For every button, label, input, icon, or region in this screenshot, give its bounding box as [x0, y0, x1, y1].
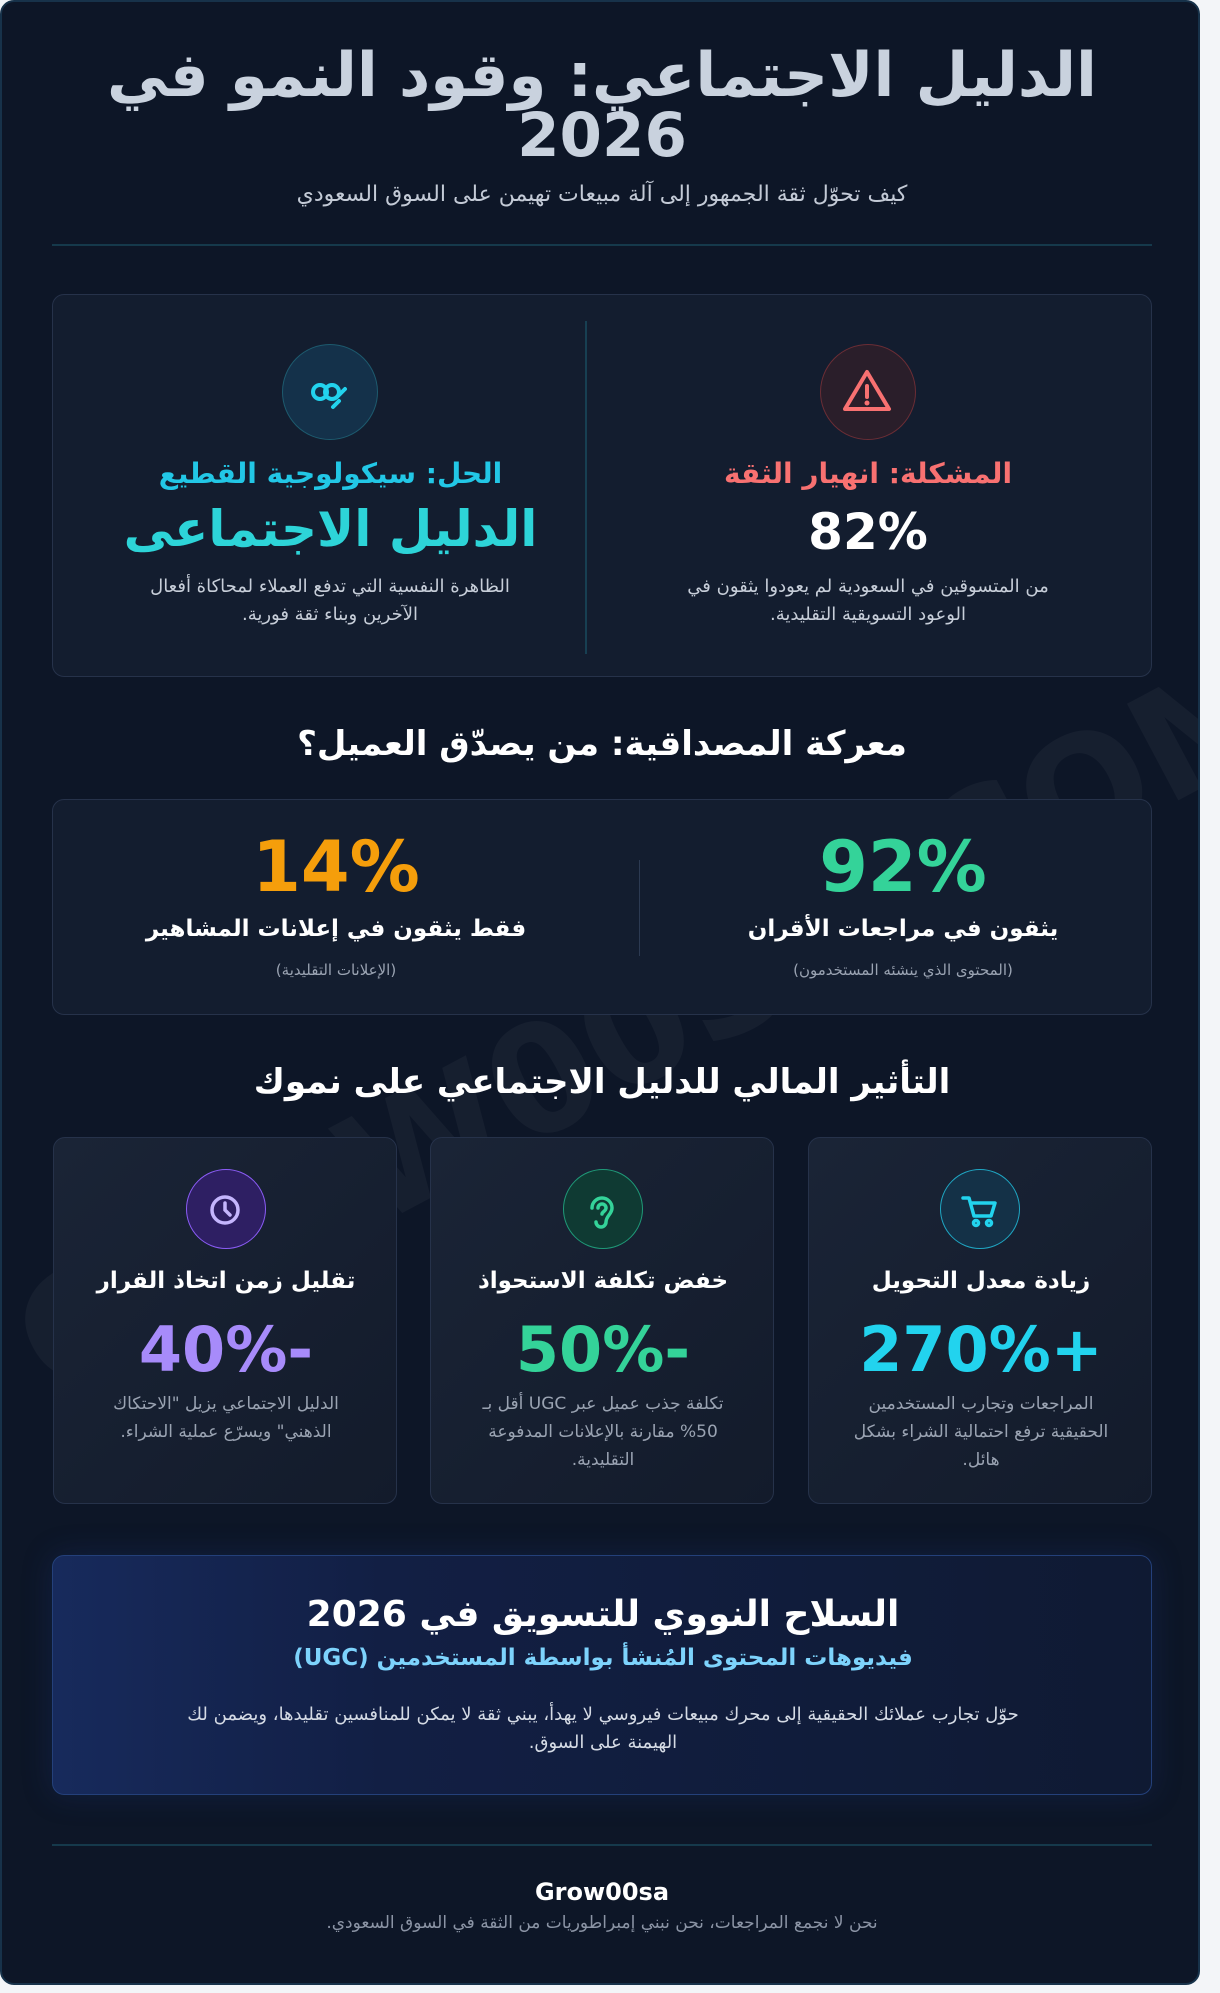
footer brand: Grow00sa — [535, 1878, 669, 1906]
card: acquisition cost: تكلفة جذب عميل عبر UGC أقل بـ 50% مقارنة بالإعلانات المدفوعة التقليدية. — [483, 1394, 723, 1470]
text: من المتسوقين في السعودية لم يعودوا يثقون في الوعود التسويقية التقليدية. — [687, 576, 1049, 625]
icon: warning — [820, 344, 916, 440]
card: conversion: 270%+ — [859, 1313, 1103, 1386]
stat 92% peers: يثقون في مراجعات الأقران — [748, 916, 1058, 942]
icon: cart — [940, 1169, 1020, 1249]
stat 92% peers — [748, 826, 1058, 979]
card: decision time: الدليل الاجتماعي يزيل "الاحتكاك الذهني" ويسرّع عملية الشراء. — [113, 1394, 339, 1442]
text: الظاهرة النفسية التي تدفع العملاء لمحاكاة أفعال الآخرين وبناء ثقة فورية. — [150, 576, 510, 625]
card: decision time: تقليل زمن اتخاذ القرار — [97, 1268, 355, 1294]
callout: UGC — [52, 1555, 1152, 1795]
icon: handshake — [282, 344, 378, 440]
callout: UGC: حوّل تجارب عملائك الحقيقية إلى محرك مبيعات فيروسي لا يهدأ، يبني ثقة لا يمكن للمنافسين تقليدها، ويضمن لك الهيمنة على السوق. — [187, 1704, 1019, 1753]
card: decision time: 40%- — [139, 1313, 313, 1386]
stat 14% celebrities: فقط يثقون في إعلانات المشاهير — [146, 916, 526, 942]
section heading: credibility: معركة المصداقية: من يصدّق العميل؟ — [297, 724, 907, 764]
card: acquisition cost: 50%- — [516, 1313, 690, 1386]
card: conversion: المراجعات وتجارب المستخدمين الحقيقية ترفع احتمالية الشراء بشكل هائل. — [854, 1394, 1108, 1470]
section heading: financial impact: التأثير المالي للدليل الاجتماعي على نموك — [254, 1062, 950, 1102]
stat 82%: 82% — [808, 503, 928, 561]
card: conversion: زيادة معدل التحويل — [872, 1268, 1090, 1294]
icon: clock — [186, 1169, 266, 1249]
callout: UGC: السلاح النووي للتسويق في 2026 — [307, 1594, 899, 1635]
card: conversion — [808, 1137, 1152, 1504]
stat 92% peers: 92% — [819, 826, 987, 908]
card: acquisition cost: خفض تكلفة الاستحواذ — [478, 1268, 728, 1294]
title: الدليل الاجتماعي: وقود النمو في 2026 — [107, 40, 1097, 171]
subtitle: كيف تحوّل ثقة الجمهور إلى آلة مبيعات تهيمن على السوق السعودي — [297, 182, 907, 207]
footer tagline: نحن لا نجمع المراجعات، نحن نبني إمبراطوريات من الثقة في السوق السعودي. — [326, 1913, 878, 1933]
panel: problem and solution — [52, 294, 1152, 677]
callout: UGC: فيديوهات المحتوى المُنشأ بواسطة المستخدمين (UGC) — [293, 1645, 913, 1671]
stat 14% celebrities — [144, 826, 526, 979]
solution column — [124, 344, 537, 625]
icon: ear — [563, 1169, 643, 1249]
stat 92% peers: (المحتوى الذي ينشئه المستخدمون) — [793, 961, 1013, 979]
card: decision time — [53, 1137, 397, 1504]
panel: credibility comparison — [52, 799, 1152, 1015]
stat 14% celebrities: (الإعلانات التقليدية) — [276, 961, 396, 979]
card: acquisition cost — [430, 1137, 774, 1504]
stat 14% celebrities: 14% — [252, 826, 420, 908]
heading: problem: المشكلة: انهيار الثقة — [724, 457, 1012, 490]
big label: الدليل الاجتماعى — [124, 500, 537, 558]
problem column — [687, 344, 1049, 625]
heading: solution: الحل: سيكولوجية القطيع — [159, 457, 502, 490]
